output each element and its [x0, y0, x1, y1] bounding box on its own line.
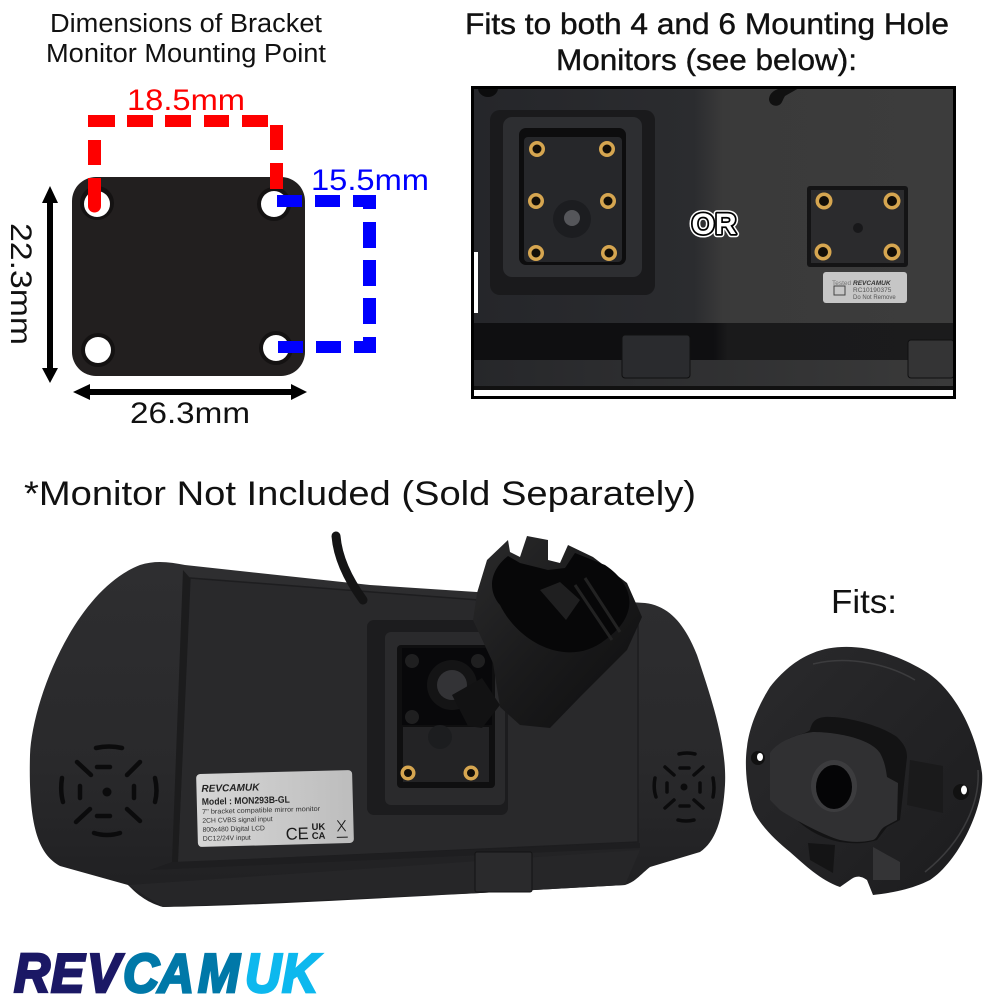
- tested sticker: [823, 272, 907, 303]
- product label sticker: Model : MON293B-GL: [202, 795, 290, 808]
- tested sticker: RC10190375: [853, 287, 892, 294]
- ball joint and arm: [427, 660, 500, 728]
- heading: monitor not included: *Monitor Not Included (Sold Separately): [24, 475, 696, 513]
- right speaker grille: [654, 753, 714, 821]
- raised centre panel: [177, 578, 638, 863]
- small lower details: [808, 843, 835, 873]
- blue dashed dimension line: [277, 195, 376, 353]
- tested sticker: Tested: [832, 280, 852, 287]
- arrow: horizontal 26.3mm: [73, 384, 307, 400]
- lower lip: [128, 850, 640, 907]
- tested sticker: REVCAMUK: [853, 280, 892, 287]
- product label sticker: CA: [312, 831, 326, 842]
- panel: bracket dimensions diagram: [4, 84, 429, 430]
- label: OR: OR: [692, 208, 737, 241]
- product label sticker: 2CH CVBS signal input: [202, 816, 273, 825]
- heading: fits to both monitors: Monitors (see below):: [556, 44, 857, 77]
- product label sticker: CE: [285, 824, 309, 844]
- heading: dimensions of bracket: [46, 10, 326, 68]
- frame: [472, 88, 954, 398]
- logo: REVCAMUK: [14, 943, 322, 1000]
- bracket cup: [473, 536, 642, 728]
- tabs: [622, 335, 690, 378]
- top cable hole and corner hole: [478, 88, 498, 97]
- heading: fits to both monitors: [465, 8, 949, 77]
- label: 22.3mm: 22.3mm: [4, 223, 37, 345]
- lower dark band: [473, 323, 954, 360]
- arrow: vertical 22.3mm: [42, 186, 58, 383]
- monitor body: [30, 562, 725, 907]
- red label: 18.5mm: 18.5mm: [127, 84, 245, 117]
- mount recess: [367, 620, 508, 815]
- product label sticker: [196, 770, 354, 847]
- product label sticker: DC12/24V input: [203, 835, 251, 843]
- cable: [336, 536, 363, 600]
- product label sticker: REVCAMUK: [201, 782, 260, 795]
- raised centre front face: [770, 732, 898, 842]
- label: 26.3mm: 26.3mm: [130, 397, 250, 430]
- label: fits: Fits:: [831, 583, 897, 620]
- four-hole mount: [807, 186, 908, 267]
- blue label: 15.5mm: 15.5mm: [311, 164, 429, 197]
- flat recess on right: [907, 760, 943, 813]
- monitor photo: [30, 536, 725, 907]
- label: OR: OR: [692, 208, 737, 241]
- heading: fits to both monitors: Fits to both 4 and 6 Mounting Hole: [465, 8, 949, 41]
- product label sticker: UK: [311, 822, 326, 833]
- left speaker grille: [61, 746, 157, 835]
- screw holes: [751, 751, 765, 765]
- raised centre back step: [770, 717, 907, 843]
- bottom tab: [475, 852, 532, 892]
- rim highlights: [813, 661, 978, 872]
- six-hole mount recess: [490, 110, 655, 295]
- red dashed dimension line: [88, 115, 283, 212]
- heading: dimensions of bracket: Dimensions of Bracket: [50, 10, 322, 38]
- panel: monitor back photo with mounting holes: [471, 86, 956, 399]
- round bracket base photo: [746, 647, 982, 895]
- white notch at left edge: [474, 252, 478, 313]
- centre hole: [811, 760, 857, 812]
- product label sticker: 800x480 Digital LCD: [202, 825, 265, 834]
- product label sticker: 7" bracket compatible mirror monitor: [202, 806, 321, 816]
- black mounting plate with four holes: [72, 177, 305, 376]
- heading: dimensions of bracket: Monitor Mounting Point: [46, 40, 326, 68]
- white bottom strip: [473, 390, 954, 397]
- tested sticker: Do Not Remove: [853, 295, 896, 301]
